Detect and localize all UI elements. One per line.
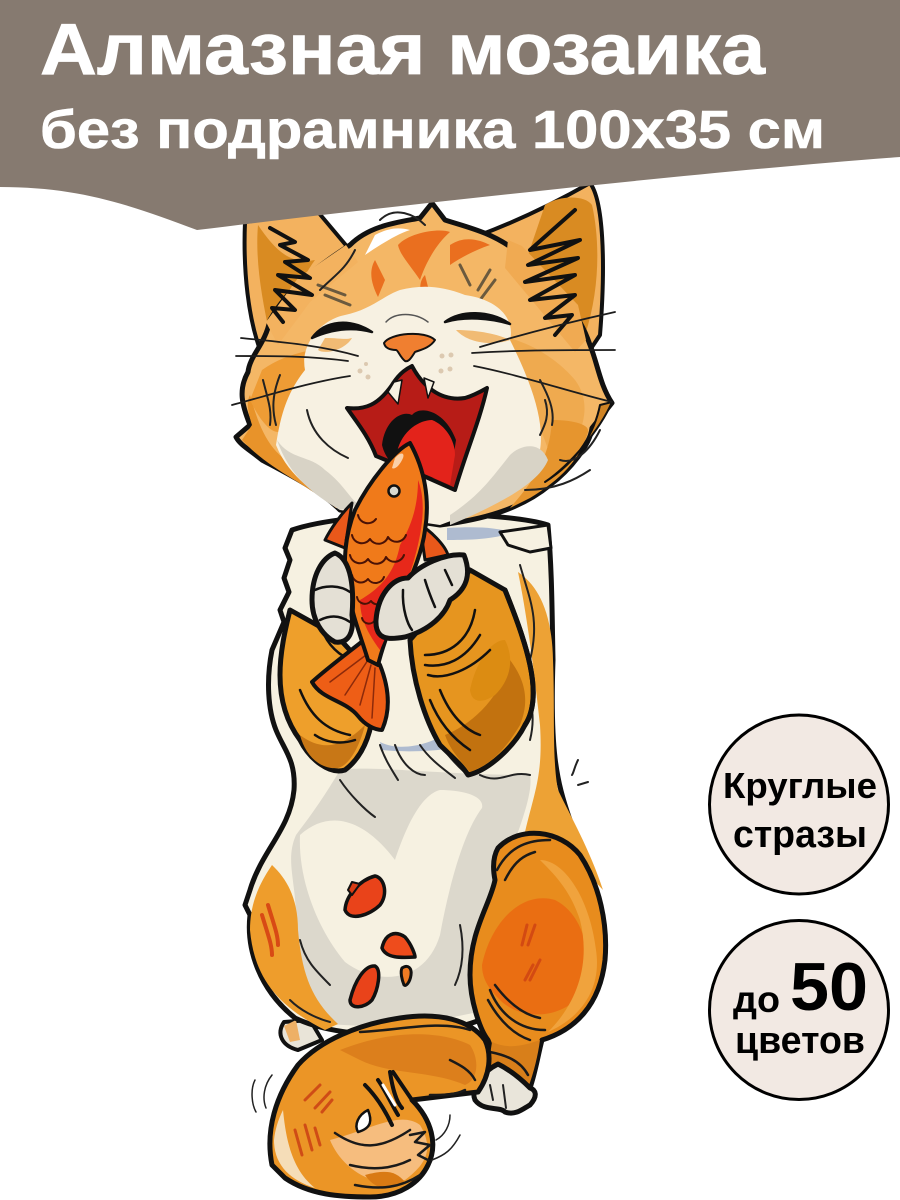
brow arc [386, 314, 428, 322]
tail gap [356, 1110, 370, 1132]
cheek shadows [277, 440, 360, 510]
badge: up to 50 colours: 50 [790, 949, 868, 1025]
right ear fur [525, 210, 580, 335]
illustration: orange cat eating a fish [232, 183, 615, 1197]
title: Алмазная мозаика [40, 10, 766, 90]
fish scales [350, 515, 406, 624]
white face [276, 287, 541, 525]
right closed eye [445, 313, 510, 324]
body grey shading [291, 769, 531, 1028]
chest fur on top [500, 525, 551, 552]
cat right paw [376, 555, 468, 638]
tail inner shading [340, 1034, 476, 1085]
belly highlight [300, 790, 482, 977]
forehead stripes [371, 231, 490, 297]
subtitle: без подрамника 100х35 см [40, 100, 825, 160]
shin [488, 1040, 540, 1088]
ear-to-head blend left [266, 245, 358, 345]
cat right arm [410, 570, 533, 775]
eaten fish pieces [345, 876, 415, 1007]
badge: up to 50 colours: до [733, 979, 780, 1020]
badge: round rhinestones [710, 715, 888, 894]
freckles [358, 352, 454, 380]
body right orange flank [518, 572, 603, 890]
cat left paw [312, 553, 353, 642]
fish right fin [420, 525, 448, 560]
leg fur strokes [488, 840, 550, 1075]
blue chest shadow [380, 732, 452, 751]
cat right hind leg [470, 833, 606, 1088]
cheek fur strokes [263, 212, 600, 490]
cat head [232, 203, 615, 525]
fish tail [312, 640, 388, 730]
cat left arm [280, 610, 373, 771]
cat far hind foot [280, 1020, 322, 1050]
fish left fin [325, 503, 352, 548]
body left orange flank [250, 865, 338, 1030]
fangs [388, 378, 434, 404]
upper cheek orange right [470, 334, 585, 470]
tail motion lines [252, 1075, 460, 1160]
badge: round rhinestones: Круглые [723, 765, 877, 806]
badge: round rhinestones: стразы [733, 814, 867, 856]
upper cheek orange left [250, 340, 352, 432]
neck ruff tips [545, 402, 612, 482]
fish body [345, 443, 427, 665]
ear-to-head blend right [505, 240, 586, 352]
fish eye [388, 486, 400, 496]
fish [312, 443, 448, 730]
whiskers [232, 312, 615, 405]
tail fur strokes [335, 1026, 475, 1188]
leg inner glow [482, 898, 587, 1014]
cat right ear [480, 183, 603, 350]
left closed eye [312, 323, 372, 338]
cat left ear [245, 212, 350, 355]
fish highlight [392, 454, 403, 468]
header banner [0, 0, 900, 230]
badge: up to 50 colours: цветов [735, 1020, 865, 1062]
mouth [347, 366, 487, 490]
lower left cheek orange [242, 395, 345, 508]
cat tail [252, 1016, 489, 1197]
forehead highlight [365, 228, 410, 255]
cat body [245, 514, 603, 1035]
left ear fur [270, 228, 312, 322]
lower right cheek orange [510, 420, 588, 508]
brow tufts [318, 265, 495, 305]
nose [384, 334, 435, 361]
cat front foot [474, 1064, 535, 1113]
cheek blush [318, 330, 510, 352]
belly fur strokes [290, 565, 588, 1022]
badge: up to 50 colours [710, 920, 888, 1100]
